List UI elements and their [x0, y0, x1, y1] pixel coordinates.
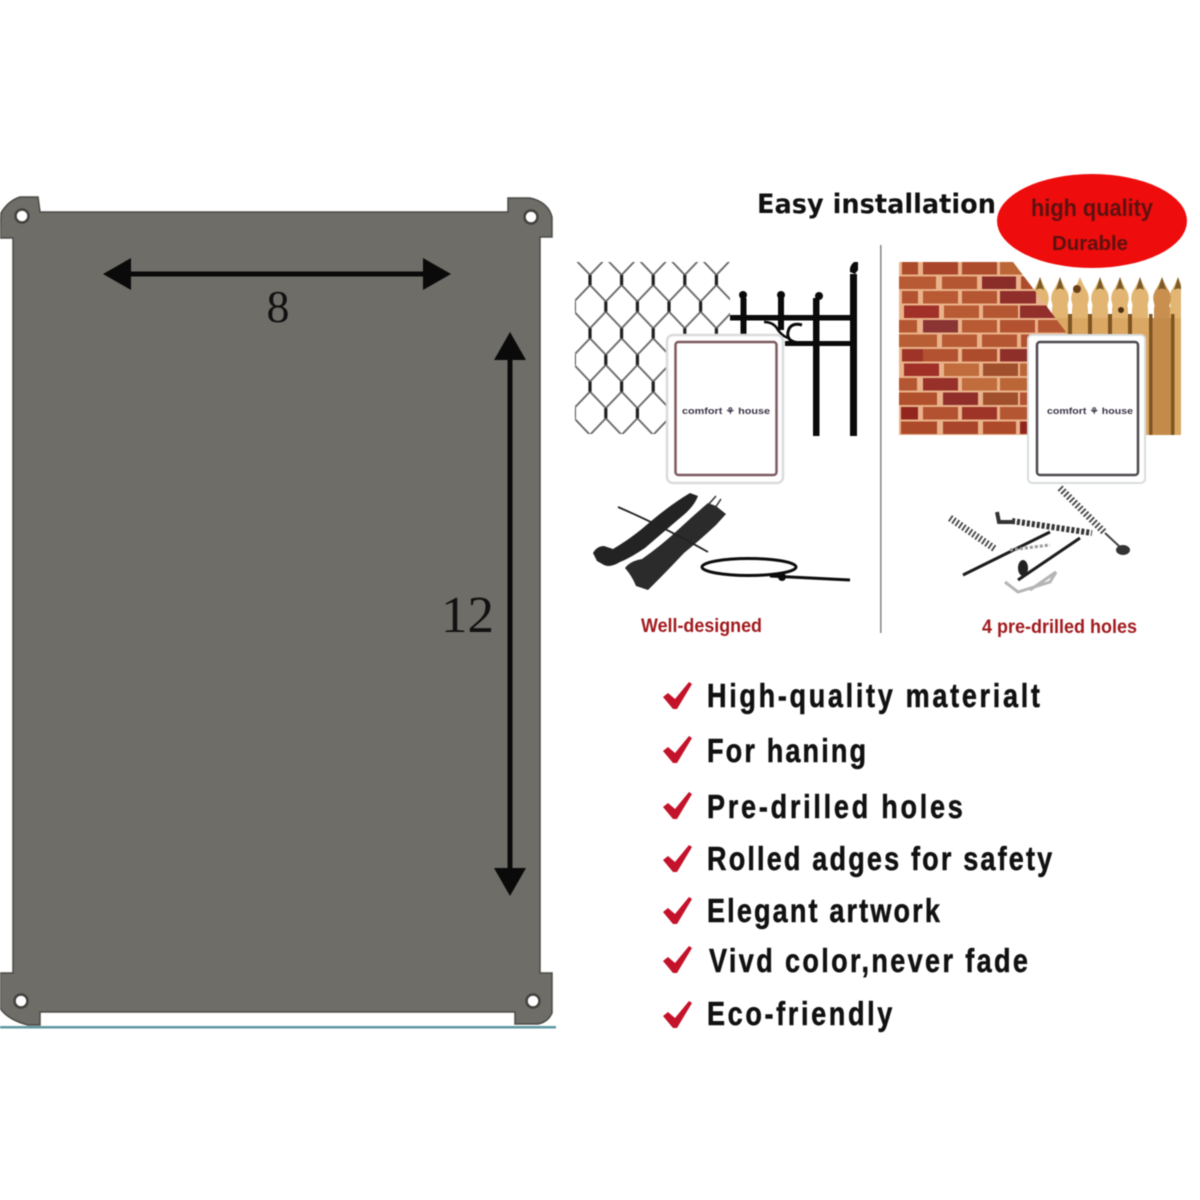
divider [880, 245, 882, 633]
height label: 12 [441, 587, 494, 644]
arrow: width dimension [103, 258, 451, 290]
screws and wall anchors [950, 488, 1130, 592]
mounting hole: bottom right [526, 994, 540, 1008]
panel: brick wall and wood fence installation [899, 262, 1187, 638]
mounting hole: top left [16, 210, 28, 222]
sign mockup [667, 335, 783, 483]
badge: high quality durable: high quality [1031, 195, 1154, 222]
item: rolled edges: Rolled adges for safety [707, 842, 1052, 878]
width label: 8 [266, 281, 290, 332]
badge: high quality durable [997, 174, 1187, 268]
panel: metal sign plate with dimensions [0, 197, 552, 1025]
sign mockup [1028, 335, 1145, 483]
item: high-quality material: High-quality materialt [707, 679, 1040, 715]
heading: easy installation: Easy installation [757, 189, 996, 220]
mounting hole: top right [524, 210, 538, 224]
sign mockup: comfort ⚘ house [682, 406, 770, 416]
item: pre-drilled holes: Pre-drilled holes [707, 790, 963, 826]
plate body [0, 197, 552, 1025]
item: eco-friendly: Eco-friendly [707, 997, 893, 1033]
wood fence [1031, 277, 1187, 435]
arrow: height dimension [494, 332, 526, 896]
badge: high quality durable: Durable [1052, 233, 1128, 255]
caption: 4 pre-drilled holes: 4 pre-drilled holes [982, 617, 1137, 638]
feature list [663, 679, 1052, 1033]
chain link fence [575, 262, 730, 434]
iron fence [730, 262, 858, 436]
item: elegant artwork: Elegant artwork [707, 894, 940, 930]
brick wall [899, 262, 1068, 435]
panel: chain link and iron fence installation [575, 262, 858, 637]
caption: well-designed: Well-designed [641, 616, 762, 637]
sign mockup: comfort ⚘ house [1047, 406, 1133, 416]
item: for hanging: For haning [707, 734, 866, 770]
item: vivid color: Vivd color,never fade [709, 944, 1028, 980]
cable ties [593, 493, 850, 590]
mounting hole: bottom left [14, 994, 28, 1008]
bottom teal line [0, 1026, 556, 1028]
